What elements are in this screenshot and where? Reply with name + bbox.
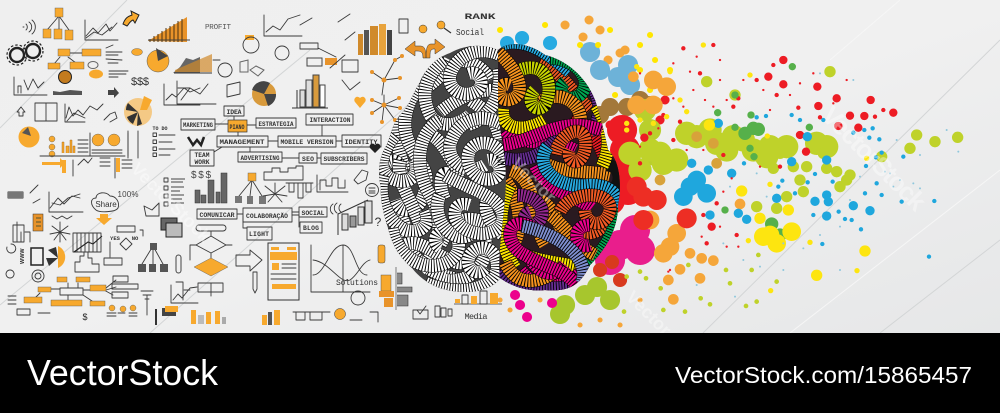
orange pie chart bbox=[132, 48, 169, 72]
box: BLOG: BLOG bbox=[303, 225, 319, 232]
box: ESTRATEGIA bbox=[256, 118, 296, 128]
watermarks: VectorStock bbox=[816, 100, 933, 217]
small red flecks bbox=[640, 57, 847, 272]
watermarks bbox=[127, 100, 933, 340]
refresh icons bbox=[6, 244, 16, 278]
orange pie left bbox=[18, 126, 40, 148]
yes no flow bbox=[104, 226, 143, 265]
antenna bbox=[141, 291, 153, 315]
dollar symbol: $ bbox=[82, 312, 88, 322]
picture frames bbox=[144, 203, 182, 237]
icon: gears bbox=[7, 41, 43, 65]
hatched chart bbox=[173, 57, 200, 73]
box: IDENTITY bbox=[342, 135, 381, 147]
phone mockup bbox=[268, 243, 299, 300]
radial network bbox=[50, 222, 70, 242]
left side: business sketches bbox=[6, 8, 502, 325]
org tree lower bbox=[138, 243, 168, 272]
splatter field right bbox=[624, 45, 958, 312]
footer bar bbox=[0, 333, 1000, 413]
box: SOCIAL bbox=[299, 207, 327, 217]
paint splatter behind brain bbox=[500, 20, 670, 325]
icon: open book bbox=[35, 103, 57, 121]
power icon bbox=[334, 308, 346, 320]
footer url: VectorStock.com/15865457 bbox=[675, 362, 972, 388]
lower lime flecks bbox=[624, 255, 777, 312]
left hemisphere bbox=[379, 46, 506, 292]
icon: share cloud bbox=[92, 193, 119, 225]
dollar signs: $$$ bbox=[131, 76, 149, 88]
target icon bbox=[32, 270, 44, 282]
list lines bbox=[106, 45, 128, 77]
bars under chart bbox=[75, 252, 99, 272]
box: TEAM WORK bbox=[190, 150, 214, 166]
box: SOCIAL: SOCIAL bbox=[302, 210, 325, 217]
to do list: TO DO bbox=[152, 125, 168, 132]
orange segmented pie bbox=[46, 246, 65, 268]
mind map business words bbox=[181, 106, 381, 240]
box: MOBILE VERSION: MOBILE VERSION bbox=[280, 139, 334, 146]
box: TEAM WORK: TEAM bbox=[194, 152, 210, 159]
orange flow bbox=[48, 49, 103, 84]
tablet icon bbox=[31, 248, 43, 265]
line chart lower bbox=[49, 192, 83, 219]
3D bars bbox=[338, 200, 372, 235]
footer logo: VectorStock bbox=[27, 352, 219, 393]
box: COMUNICAR bbox=[197, 209, 237, 219]
orange stacked blocks bbox=[379, 267, 412, 310]
box: INTERACTION: INTERACTION bbox=[310, 117, 351, 124]
question mark: ? bbox=[375, 215, 382, 229]
icon: orange double arrows bbox=[405, 39, 445, 58]
box: PIANO: PIANO bbox=[230, 124, 245, 131]
text: social: Social bbox=[456, 27, 484, 38]
small boxes bbox=[293, 312, 378, 322]
watermarks: Vector bbox=[507, 154, 560, 207]
dashboard row bbox=[40, 133, 128, 173]
zigzag chart bbox=[65, 104, 103, 122]
large red and pink washes bbox=[500, 110, 655, 325]
icon: small notes bbox=[8, 185, 72, 203]
mind map bbox=[8, 276, 138, 315]
blue washes bbox=[683, 180, 707, 197]
connectors bbox=[214, 116, 342, 228]
box: SUBSCRIBERS: SUBSCRIBERS bbox=[324, 156, 365, 163]
box: MARKETING: MARKETING bbox=[183, 122, 213, 129]
folder orange bbox=[162, 306, 178, 316]
box: ADVERTISING: ADVERTISING bbox=[240, 155, 280, 162]
document strip bbox=[73, 158, 132, 178]
box: BLOG bbox=[300, 222, 322, 233]
icon: pencil bbox=[253, 272, 257, 293]
orange circles bbox=[107, 305, 137, 316]
rising arrow bbox=[74, 236, 102, 252]
text: rank: RANK bbox=[464, 12, 497, 22]
brain bbox=[379, 44, 620, 292]
hatched area chart bbox=[73, 233, 101, 252]
burst pie bbox=[124, 96, 152, 126]
box: TEAM WORK: WORK bbox=[194, 159, 210, 166]
icon: paperclip bbox=[176, 255, 181, 273]
small line chart bbox=[171, 285, 198, 303]
orange bars bottom bbox=[191, 310, 280, 325]
text: profit: PROFIT bbox=[205, 24, 231, 32]
box: MARKETING bbox=[181, 119, 215, 130]
yes no flow: NO bbox=[132, 235, 139, 242]
box: SEO: SEO bbox=[302, 156, 314, 163]
bars lower left bbox=[13, 222, 30, 242]
box: LIGHT: LIGHT bbox=[249, 231, 269, 238]
chart right bbox=[128, 131, 138, 158]
orange heart bbox=[354, 97, 366, 108]
text: www: WWW bbox=[20, 248, 26, 264]
small bar chart bbox=[454, 291, 502, 304]
box: MANAGEMENT: MANAGEMENT bbox=[220, 139, 265, 146]
splatter near brain, upper bbox=[500, 20, 670, 130]
box: IDEA bbox=[224, 106, 244, 116]
box: COLABORACAO bbox=[243, 208, 292, 222]
dollar row: $$$ bbox=[191, 170, 211, 181]
orange doc icon bbox=[33, 214, 43, 231]
text: solutions: Solutions bbox=[336, 279, 378, 288]
box: MANAGEMENT bbox=[217, 136, 268, 147]
green spots bbox=[745, 128, 780, 235]
icon: share cloud: Share bbox=[95, 200, 117, 209]
box: ADVERTISING bbox=[238, 152, 282, 162]
orange bottle bbox=[378, 245, 385, 263]
flowchart bbox=[176, 225, 262, 300]
icon: arrow right bbox=[108, 87, 119, 98]
icon: W logo bbox=[188, 137, 204, 145]
icon: sound waves bbox=[23, 20, 35, 34]
ochre mix bbox=[660, 137, 717, 180]
orange triangle top bbox=[174, 54, 212, 73]
box: IDEA: IDEA bbox=[226, 109, 242, 116]
top charts bbox=[243, 15, 337, 66]
clock bbox=[351, 291, 365, 305]
small arrow figure bbox=[155, 309, 157, 325]
line chart bbox=[85, 20, 118, 40]
wave line chart bbox=[311, 245, 370, 292]
lime washes bbox=[630, 130, 827, 170]
outline bars bbox=[264, 166, 303, 180]
yes no flow: YES bbox=[110, 235, 121, 242]
orange washes bbox=[637, 80, 677, 253]
box: IDENTITY: IDENTITY bbox=[344, 139, 378, 146]
red washes bbox=[637, 187, 687, 220]
top mid chart bbox=[148, 39, 190, 41]
curved lines icon bbox=[330, 203, 341, 214]
box: COMUNICAR: COMUNICAR bbox=[200, 212, 235, 219]
icon: up arrow bbox=[17, 107, 25, 116]
box: ESTRATEGIA: ESTRATEGIA bbox=[258, 121, 294, 128]
icon: curved arrow bbox=[104, 112, 117, 122]
pie chart mid top bbox=[240, 60, 276, 106]
small sketches top bbox=[177, 14, 360, 104]
triangle bar chart bbox=[148, 17, 187, 42]
org tree top bbox=[43, 8, 73, 40]
step line chart bbox=[317, 175, 348, 192]
box: MOBILE VERSION bbox=[278, 136, 336, 147]
dark strip chart bbox=[53, 90, 82, 95]
radial star bbox=[263, 183, 287, 202]
icons top bbox=[399, 19, 451, 33]
heart bbox=[370, 144, 380, 153]
watermarks: VectorStock bbox=[127, 159, 216, 247]
line chart bbox=[164, 84, 200, 105]
watermarks: Vector bbox=[622, 287, 675, 340]
box: SEO bbox=[299, 153, 317, 163]
icon: checklist squares bbox=[164, 178, 185, 206]
small chart bbox=[14, 77, 47, 95]
to do list bbox=[152, 125, 175, 156]
box: COLABORACAO: COLABORAÇÃO bbox=[246, 211, 288, 220]
mid bars top bbox=[292, 75, 328, 108]
icon: orange curved shape bbox=[354, 170, 368, 184]
icon: check box and small icons bbox=[413, 306, 452, 319]
box: SUBSCRIBERS bbox=[321, 153, 367, 164]
box: LIGHT bbox=[247, 227, 272, 240]
box: INTERACTION bbox=[306, 114, 353, 125]
chat bubble bbox=[366, 184, 378, 196]
yellow spots bbox=[763, 232, 792, 243]
hanging bars bbox=[286, 183, 313, 198]
icon: orange arrow bbox=[123, 11, 139, 26]
orange chart bars top right bbox=[358, 24, 392, 55]
right hemisphere bbox=[498, 44, 620, 290]
text: media: Media bbox=[464, 312, 488, 322]
network bbox=[370, 54, 404, 124]
box: PIANO bbox=[228, 120, 247, 132]
org tree mid bbox=[235, 173, 266, 204]
text: 100%: 100% bbox=[118, 190, 138, 199]
small blue and lime flecks bbox=[697, 73, 958, 297]
bar chart mid bbox=[195, 173, 227, 203]
